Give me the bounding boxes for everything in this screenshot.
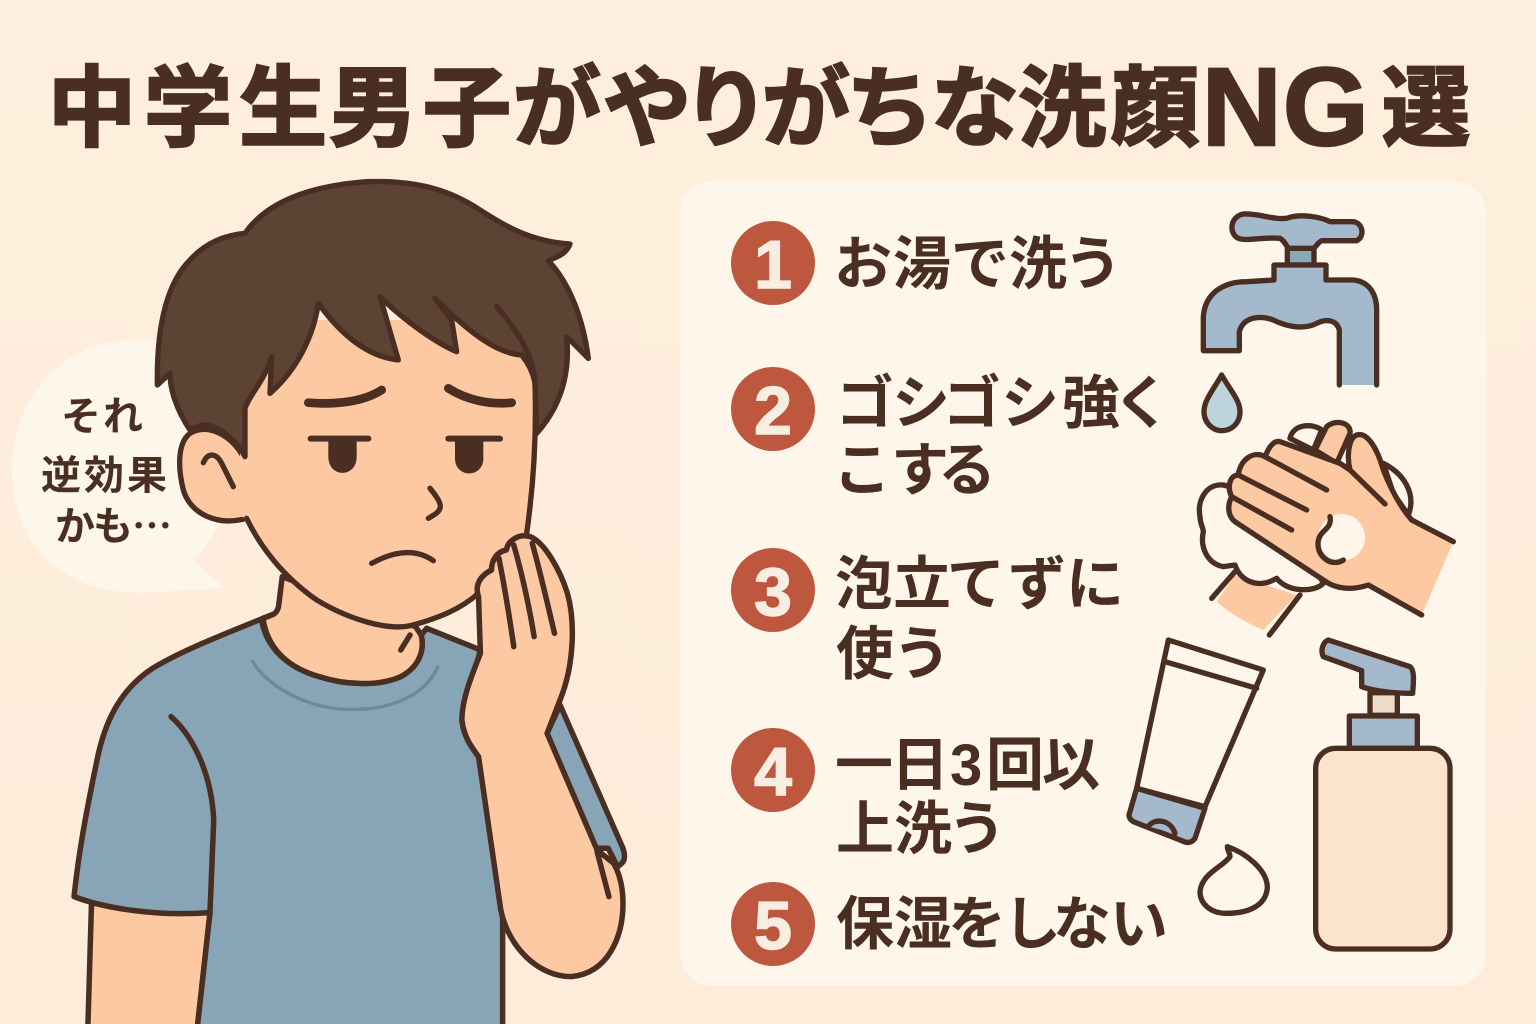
list item 4: 上洗う (836, 797, 1006, 862)
list item 2: ゴシゴシ強く (836, 371, 1171, 436)
list item 3: 泡立てずに (835, 552, 1124, 617)
list item 5: 5 (754, 888, 792, 964)
boy: hand on cheek (462, 536, 623, 977)
icon: faucet (1203, 214, 1377, 385)
list item 2 (731, 367, 1171, 503)
list item 4 (731, 728, 1100, 862)
title: 選 (1382, 59, 1470, 158)
list item 2: 2 (754, 373, 792, 449)
boy: head (157, 181, 588, 627)
panel: NG list (680, 181, 1486, 986)
icon: water drop (1204, 375, 1240, 431)
list item 5 (731, 882, 1168, 966)
list item 1 (731, 221, 1122, 305)
icon: cream dollop (1200, 847, 1267, 913)
nose (428, 488, 440, 518)
boy: body, towel, arm and neck (74, 577, 624, 1024)
list item 1: お湯で洗う (834, 232, 1122, 297)
bubble text (41, 384, 172, 552)
title: 中学生男子がやりがちな洗顔 (48, 59, 1199, 158)
eyes (311, 430, 500, 448)
bubble text: それ (61, 384, 143, 442)
list item 2: こする (833, 438, 996, 503)
bubble text: かも… (55, 494, 172, 552)
icon: pump bottle (1316, 640, 1450, 949)
list item 1: 1 (754, 227, 792, 303)
list item 3: 使う (836, 622, 951, 687)
eyebrows (308, 388, 512, 403)
list item 4: 4 (754, 734, 792, 810)
title: NG (1202, 46, 1369, 169)
mouth (372, 553, 433, 563)
icon: face wash tube (1129, 640, 1263, 842)
boy character (74, 181, 624, 1024)
bubble text: 逆効果 (41, 443, 167, 501)
speech bubble (12, 339, 236, 593)
list item 3 (731, 548, 1124, 687)
list item 5: 保湿をしない (836, 892, 1168, 957)
icon: hands with foam (1199, 422, 1453, 635)
list item 4: 一日3回以 (835, 733, 1100, 798)
list item 3: 3 (754, 554, 792, 630)
